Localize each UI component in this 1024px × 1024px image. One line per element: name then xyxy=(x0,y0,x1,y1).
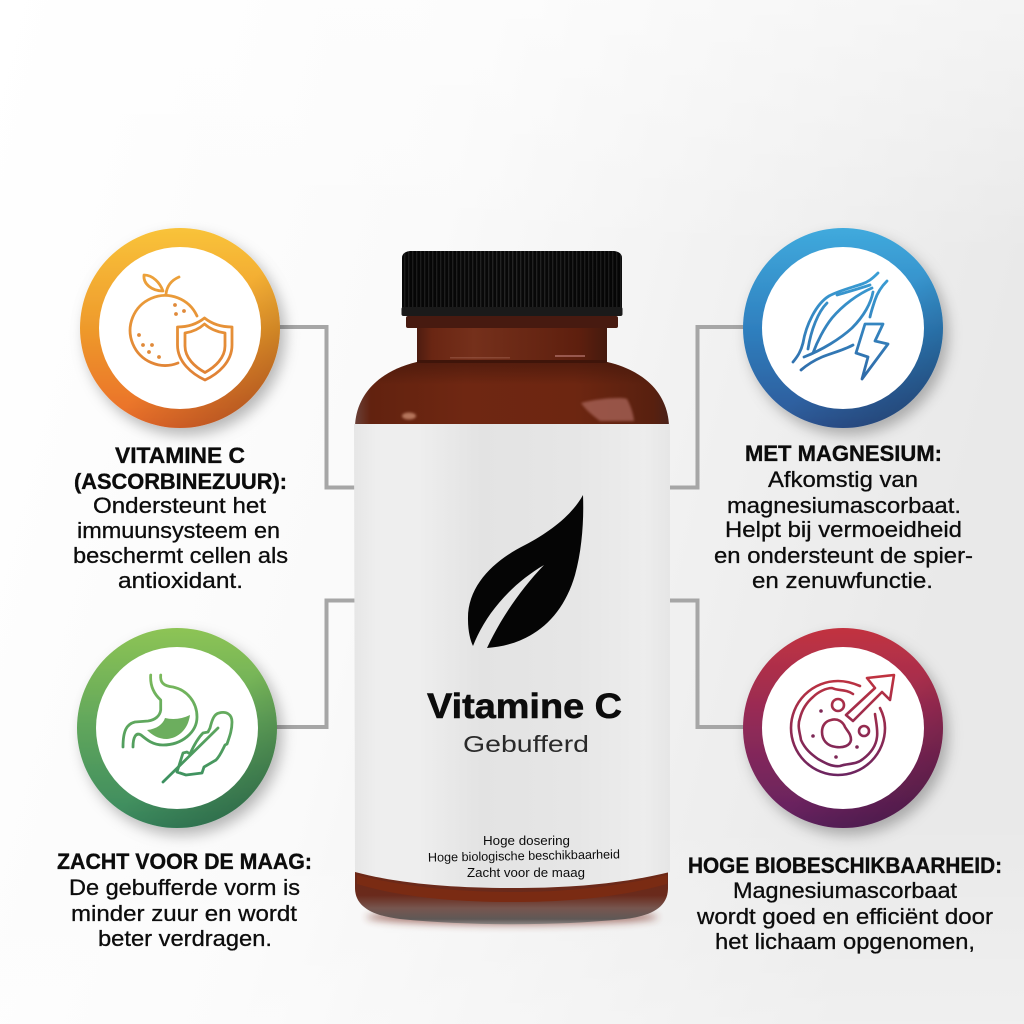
text: stomach: beter verdragen. xyxy=(98,926,272,951)
label claims xyxy=(428,834,620,880)
label claims: Hoge biologische beschikbaarheid xyxy=(428,847,620,865)
bottle shadow xyxy=(366,909,658,925)
label claims: Hoge dosering xyxy=(483,834,570,848)
bottle xyxy=(354,251,670,925)
text: bioavailability: het lichaam opgenomen, xyxy=(715,929,975,954)
text: vitamin C: Ondersteunt het xyxy=(93,493,266,518)
bottle neck xyxy=(417,326,607,363)
text: stomach: ZACHT VOOR DE MAAG: xyxy=(57,849,312,874)
icon: stomach and feather xyxy=(123,675,232,782)
shoulder highlight xyxy=(581,398,634,421)
connector: stomach to bottle xyxy=(276,600,356,727)
text: bioavailability: HOGE BIOBESCHIKBAARHEID: xyxy=(688,853,1002,878)
label claims: Zacht voor de maag xyxy=(467,866,585,880)
text: stomach xyxy=(57,849,312,951)
text: stomach: minder zuur en wordt xyxy=(71,901,297,926)
connector: bioavailability to bottle xyxy=(668,600,745,727)
text: bioavailability: Magnesiumascorbaat xyxy=(733,878,957,903)
text: magnesium: Afkomstig van xyxy=(768,467,918,492)
bottle shoulder xyxy=(355,362,669,426)
text: magnesium: MET MAGNESIUM: xyxy=(745,441,942,466)
label subtitle: Gebufferd xyxy=(463,731,589,757)
icon: muscle with lightning bolt xyxy=(793,273,888,379)
bottle label xyxy=(354,424,670,888)
bottle base xyxy=(355,860,668,924)
connector: vitamin C to bottle xyxy=(278,327,356,488)
text: magnesium xyxy=(714,441,973,593)
text: magnesium: magnesiumascorbaat. xyxy=(727,493,961,518)
text: vitamin C: antioxidant. xyxy=(118,568,243,593)
shoulder glint xyxy=(402,412,416,420)
badge: magnesium xyxy=(743,228,943,428)
text: vitamin C: VITAMINE C xyxy=(115,443,245,468)
icon: orange with shield xyxy=(130,275,232,380)
text: vitamin C: immuunsysteem en xyxy=(77,518,280,543)
text: stomach: De gebufferde vorm is xyxy=(69,875,300,900)
text: magnesium: Helpt bij vermoeidheid xyxy=(725,517,962,542)
text: vitamin C: beschermt cellen als xyxy=(73,543,288,568)
text: vitamin C: (ASCORBINEZUUR): xyxy=(74,469,287,494)
neck ring xyxy=(406,316,618,328)
connector: magnesium to bottle xyxy=(668,327,745,488)
icon: leaf logo xyxy=(468,495,583,648)
cap xyxy=(402,251,622,316)
badge: bioavailability xyxy=(743,628,943,828)
text: vitamin C xyxy=(73,443,288,593)
text: bioavailability: wordt goed en efficiënt door xyxy=(696,904,993,929)
icon: cell with arrow xyxy=(791,675,894,775)
text: magnesium: en ondersteunt de spier- xyxy=(714,543,973,568)
text: magnesium: en zenuwfunctie. xyxy=(752,568,933,593)
badge: stomach xyxy=(77,628,277,828)
label title: Vitamine C xyxy=(427,687,622,726)
text: bioavailability xyxy=(688,853,1002,954)
badge: vitamin C xyxy=(80,228,280,428)
